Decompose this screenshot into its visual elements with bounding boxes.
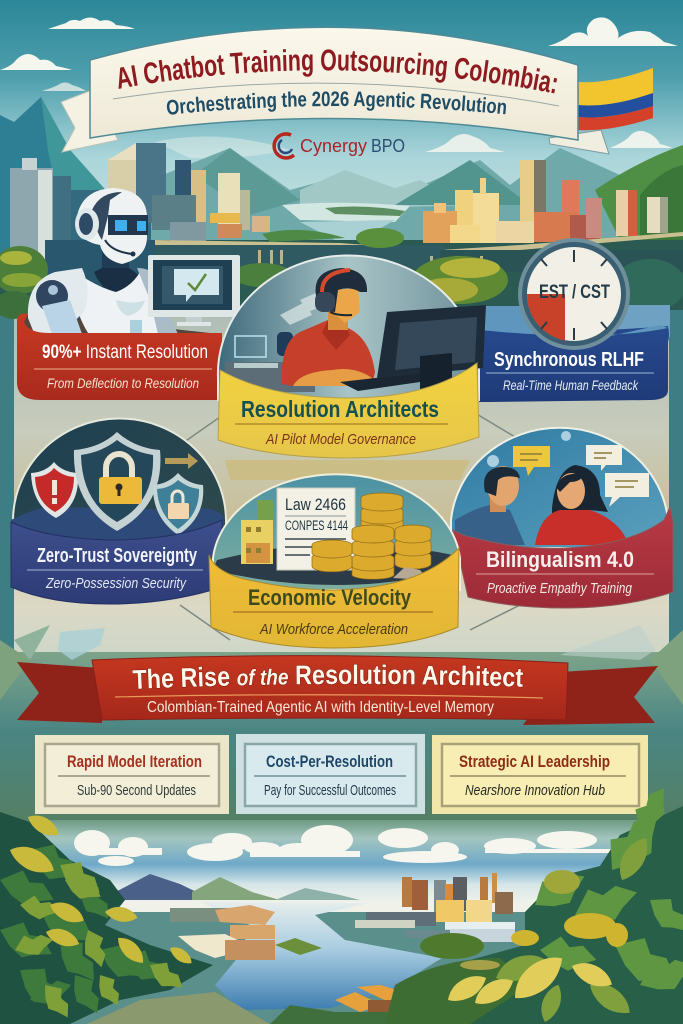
title line 2: Orchestrating the 2026 Agentic Revolution — [166, 91, 506, 115]
panel: bilingualism 4.0 — [451, 428, 673, 608]
speech bubbles — [513, 445, 649, 507]
clock: EST / CST: EST / CST — [539, 282, 610, 303]
subtext: empathy training: Proactive Empathy Training — [487, 580, 633, 597]
bottom landscape scene — [0, 781, 683, 1024]
panel: synchronous RLHF — [479, 238, 669, 402]
gold coin stacks — [312, 493, 431, 579]
subtext: deflection: From Deflection to Resolution — [47, 375, 199, 391]
panel: instant resolution — [17, 188, 240, 400]
subtext: workforce acceleration: AI Workforce Acceleration — [259, 621, 408, 638]
computer monitor — [340, 305, 486, 391]
navy band — [11, 520, 222, 604]
card: cost-per-resolution: Pay for Successful Outcomes — [264, 782, 396, 799]
document: Law 2466 and CONPES 4144: Law 2466 — [285, 495, 346, 514]
woman — [535, 465, 629, 545]
panel: economic velocity — [209, 474, 460, 648]
right tail — [549, 130, 609, 154]
mini buildings — [241, 500, 273, 564]
panel: zero-trust sovereignty — [11, 419, 226, 604]
heading: synchronous RLHF: Synchronous RLHF — [494, 349, 644, 371]
banner body — [90, 27, 578, 140]
lake in the valley — [262, 203, 410, 242]
icon: small shield with lock — [153, 473, 203, 535]
card: rapid model iteration: Rapid Model Iteration — [67, 752, 202, 771]
card: cost-per-resolution: Cost-Per-Resolution — [266, 752, 393, 771]
river — [200, 902, 442, 1010]
monitor with checkmark — [148, 255, 240, 326]
man — [455, 466, 525, 545]
highway and forest band — [0, 228, 683, 337]
subtext: identity-level memory: Colombian-Trained Agentic AI with Identity-Level Memory — [147, 699, 494, 716]
icon: main shield with padlock — [74, 432, 160, 531]
lower sky — [30, 820, 650, 912]
distant mountains — [100, 874, 360, 900]
heading: resolution architects: Resolution Architects — [241, 396, 439, 422]
near-shore buildings — [170, 905, 420, 1012]
title line 1: AI Chatbot Training Outsourcing Colombia: — [118, 49, 558, 94]
lower clouds — [74, 825, 617, 866]
ribbon: rise of the resolution architect — [17, 655, 658, 725]
heading: rise of the resolution architect: The Rise of the Resolution Architect — [132, 664, 524, 690]
agent with headset — [277, 268, 375, 386]
card: rapid model iteration — [35, 735, 229, 814]
panel: resolution architects — [218, 255, 486, 458]
left foliage — [0, 810, 213, 1024]
clock: EST / CST — [518, 238, 630, 350]
heading: zero-trust sovereignty: Zero-Trust Sovereignty — [37, 545, 198, 567]
right city skyline — [423, 160, 668, 243]
mountains — [0, 97, 683, 260]
logo: Cynergy BPO — [274, 134, 405, 158]
red band — [17, 314, 222, 400]
card: cost-per-resolution — [236, 734, 425, 814]
gold band — [209, 548, 459, 648]
right foliage — [385, 781, 683, 1024]
subtext: governance: AI Pilot Model Governance — [265, 431, 416, 448]
heading: 90%+ instant resolution: 90%+ Instant Resolution — [42, 342, 208, 363]
title banner — [60, 26, 653, 154]
card: rapid model iteration: Sub-90 Second Updates — [77, 782, 196, 799]
colombian flag — [578, 68, 653, 130]
document: Law 2466 and CONPES 4144 — [277, 488, 355, 570]
subtext: human feedback: Real-Time Human Feedback — [503, 377, 639, 393]
document: Law 2466 and CONPES 4144: CONPES 4144 — [285, 518, 348, 533]
robot — [17, 188, 210, 334]
card: strategic AI leadership: Strategic AI Leadership — [459, 752, 610, 771]
sky clouds — [0, 17, 678, 158]
arrow — [165, 453, 198, 469]
logo: Cynergy BPO: Cynergy — [300, 136, 367, 156]
heading: bilingualism 4.0: Bilingualism 4.0 — [486, 547, 634, 572]
left city skyline — [10, 143, 270, 260]
subtext: zero-possession: Zero-Possession Security — [45, 575, 187, 592]
foreground hills — [87, 992, 270, 1024]
crimson band — [453, 507, 673, 608]
left tail — [61, 90, 118, 152]
card: strategic AI leadership: Nearshore Innovation Hub — [465, 782, 605, 799]
heading: economic velocity: Economic Velocity — [248, 585, 412, 610]
logo: Cynergy BPO: BPO — [371, 136, 405, 156]
yellow band — [218, 363, 479, 458]
card: strategic AI leadership — [432, 735, 648, 814]
icon: red warning shield — [31, 462, 78, 518]
far-shore city — [355, 873, 515, 942]
